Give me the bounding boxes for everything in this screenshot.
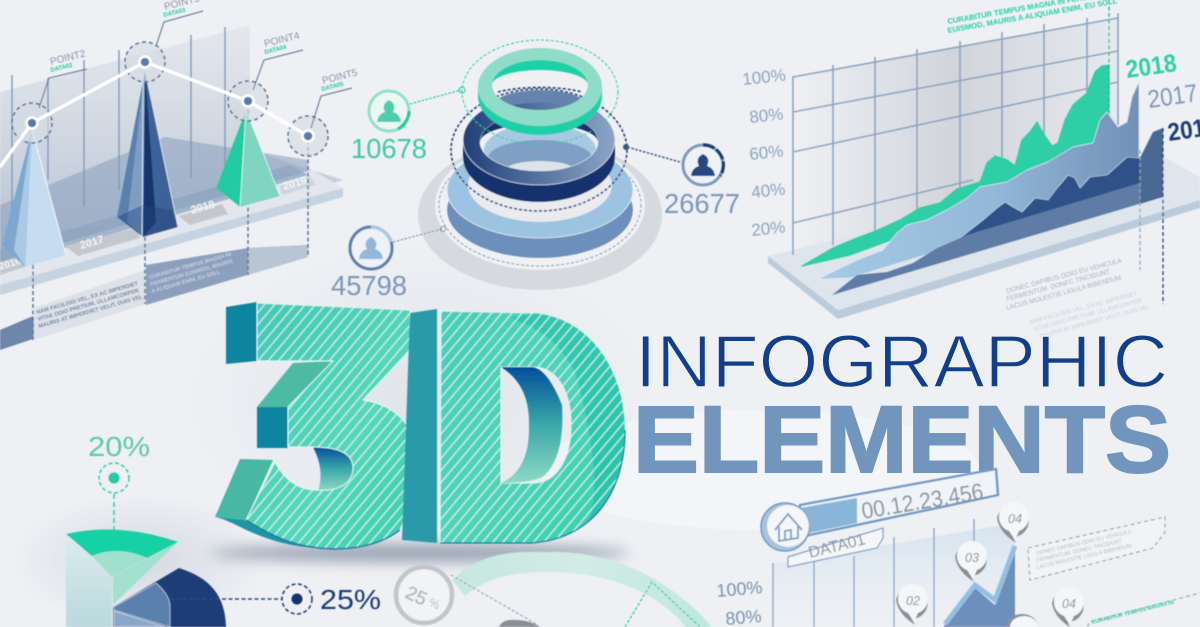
dark pie (113, 568, 226, 627)
right area chart panel (741, 0, 1200, 340)
grid lines (793, 13, 1118, 255)
chart floor (0, 170, 343, 285)
green top ring (478, 48, 602, 135)
year label 2018: 2018 (1124, 49, 1178, 84)
area chart (943, 546, 1015, 627)
grid verticals (12, 27, 225, 240)
point labels: DATA04 (264, 45, 288, 56)
grey note text (1006, 257, 1123, 312)
value 20%: 20% (88, 431, 150, 462)
point labels: DATA03 (163, 8, 187, 19)
platform edge (0, 188, 343, 295)
arch band (452, 552, 712, 627)
dashed green note box (1087, 593, 1200, 627)
grey gauge circle: % (427, 595, 443, 612)
faded note text (1029, 291, 1152, 340)
pin 03 (955, 541, 987, 582)
dashed note box: DONEC DAPIBUS ODIO EU VEHICULA (1036, 529, 1133, 557)
rear mountain area (0, 137, 308, 270)
25% leader (170, 598, 281, 600)
heading ELEMENTS: ELEMENTS (633, 387, 1171, 493)
grid wall shading (793, 18, 1118, 255)
value 10678: 10678 (351, 133, 427, 164)
series 2018 dashed marker (1108, 0, 1110, 212)
user badge 26677 (623, 144, 723, 185)
floor shaded band (0, 165, 308, 268)
lower data strip (0, 245, 308, 350)
pyramid dark blue (117, 70, 178, 237)
point labels: POINT2 (49, 48, 87, 68)
pin 02: 02 (906, 594, 920, 608)
point labels (39, 0, 359, 128)
faded note text: MAURIS AT IMPERDIET VELIT, DUIS VEL (1039, 304, 1152, 340)
lower data strip: A ALIQUAM ENIM, EU SOLL (151, 269, 222, 295)
letter 3 (215, 302, 413, 549)
pin 04: 04 (1008, 512, 1022, 526)
percent axis labels: 80% (748, 105, 784, 127)
dashed green note box: CURABITUR TEMPUS MAGNA IN (1091, 600, 1175, 626)
line points (26, 56, 314, 142)
bottom right pin chart (716, 469, 1200, 627)
shadow under 3D lettering (210, 544, 630, 562)
prism top sector (66, 530, 178, 577)
pin 03: 03 (965, 551, 979, 565)
grey dashed pointer (451, 575, 538, 625)
dashed note box: LACUS MOLESTIE LIGULA BIBENDUM (1036, 543, 1133, 571)
axis labels: 100% (716, 577, 763, 601)
pyramid green (216, 110, 280, 207)
grey note text: DONEC DAPIBUS ODIO EU VEHICULA (1006, 257, 1123, 295)
dashed series drops (1140, 128, 1163, 304)
bottom-left prism pie chart (66, 431, 381, 627)
percent axis labels: 100% (741, 66, 787, 89)
value 45798: 45798 (331, 270, 407, 301)
user badge 45798 (350, 226, 446, 269)
year tags (0, 175, 316, 275)
back wall (0, 25, 343, 285)
data tag (788, 528, 883, 567)
bottom centre arch gauge (396, 552, 712, 627)
prism left face (66, 534, 112, 627)
home icon badge (761, 503, 809, 551)
lower data strip: CURABITUR TEMPUS MAGNA IN (149, 252, 232, 281)
faded note text: VITAE ODIO PRETIUM, ULLAMCORPER (1033, 298, 1143, 333)
value 26677: 26677 (664, 188, 740, 219)
axis labels (716, 577, 763, 627)
grey note text: FERMENTUM. DONEC TINCIDUNT (1006, 269, 1111, 303)
percent axis labels (741, 66, 787, 240)
target halos (12, 42, 328, 156)
grid verticals (773, 519, 974, 627)
year tags: 2018 (190, 199, 216, 217)
green dashed orbit (462, 40, 618, 144)
dashed drop lines (33, 110, 308, 340)
lower data strip: NAM FACILISIS VEL, EX AC IMPERDIET (36, 281, 139, 316)
bottom ring (447, 124, 633, 258)
20% marker (99, 463, 129, 531)
dashed note box: FERMENTUM. DONEC TINCIDUNT (1036, 538, 1123, 564)
year tags: 2019 (282, 175, 308, 193)
lower data strip: VITAE ODIO PRETIUM, ULLAMCORPER (37, 288, 140, 323)
teal dashed pointer (625, 582, 700, 627)
area series 2017 (818, 82, 1139, 279)
point labels: DATA05 (321, 82, 345, 93)
percent axis labels: 20% (750, 218, 786, 240)
chart wall (773, 523, 1015, 627)
grey gauge circle: 25 (402, 582, 430, 610)
dashed note box (1028, 517, 1165, 580)
faded note text: NAM FACILISIS VEL, EX AC IMPERDIET (1029, 291, 1138, 326)
grey note text: LACUS MOLESTIE LIGULA BIBENDUM (1006, 274, 1122, 312)
dark dashed orbit (451, 89, 627, 211)
pin 02 (896, 584, 928, 625)
pin 04 (997, 502, 1029, 543)
point labels: DATA02 (50, 63, 74, 74)
dark gauge hub (499, 620, 540, 627)
value 25%: 25% (320, 584, 381, 615)
pin 04 lower: 04 (1062, 597, 1076, 611)
heading INFOGRAPHIC: INFOGRAPHIC (635, 320, 1168, 403)
pin 03 lower (1006, 614, 1038, 627)
25% marker (282, 584, 312, 614)
letter D (402, 309, 625, 543)
area series 2016 (832, 128, 1163, 295)
base disc (418, 140, 662, 290)
point labels: POINT4 (263, 30, 301, 50)
year tags: 2017 (79, 234, 105, 252)
prism right face (113, 542, 178, 605)
middle dark ring (463, 90, 615, 202)
counter bar (800, 469, 998, 537)
pyramid light blue (2, 130, 66, 267)
point labels: POINT5 (321, 67, 359, 87)
user badge 10678 (369, 87, 465, 131)
inner dashed orbit (498, 87, 582, 92)
grey gauge circle (396, 567, 452, 623)
3D lettering (215, 302, 625, 549)
data tag: DATA01 (807, 531, 867, 562)
pin 04 lower (1052, 587, 1084, 627)
white line series (0, 62, 308, 167)
left pyramid chart panel (0, 0, 359, 350)
percent axis labels: 40% (750, 180, 786, 202)
percent axis labels: 60% (748, 142, 784, 164)
counter bar: 00.12.23.456 (860, 478, 985, 524)
platform (768, 158, 1200, 319)
lower data strip: MAURIS AT IMPERDIET VELIT, DUIS VEL (38, 294, 144, 330)
lower data strip: FERMENTUM EUISMOD, MAURIS (150, 259, 234, 288)
area series 2018 (802, 65, 1109, 266)
center stacked rings (331, 40, 740, 301)
